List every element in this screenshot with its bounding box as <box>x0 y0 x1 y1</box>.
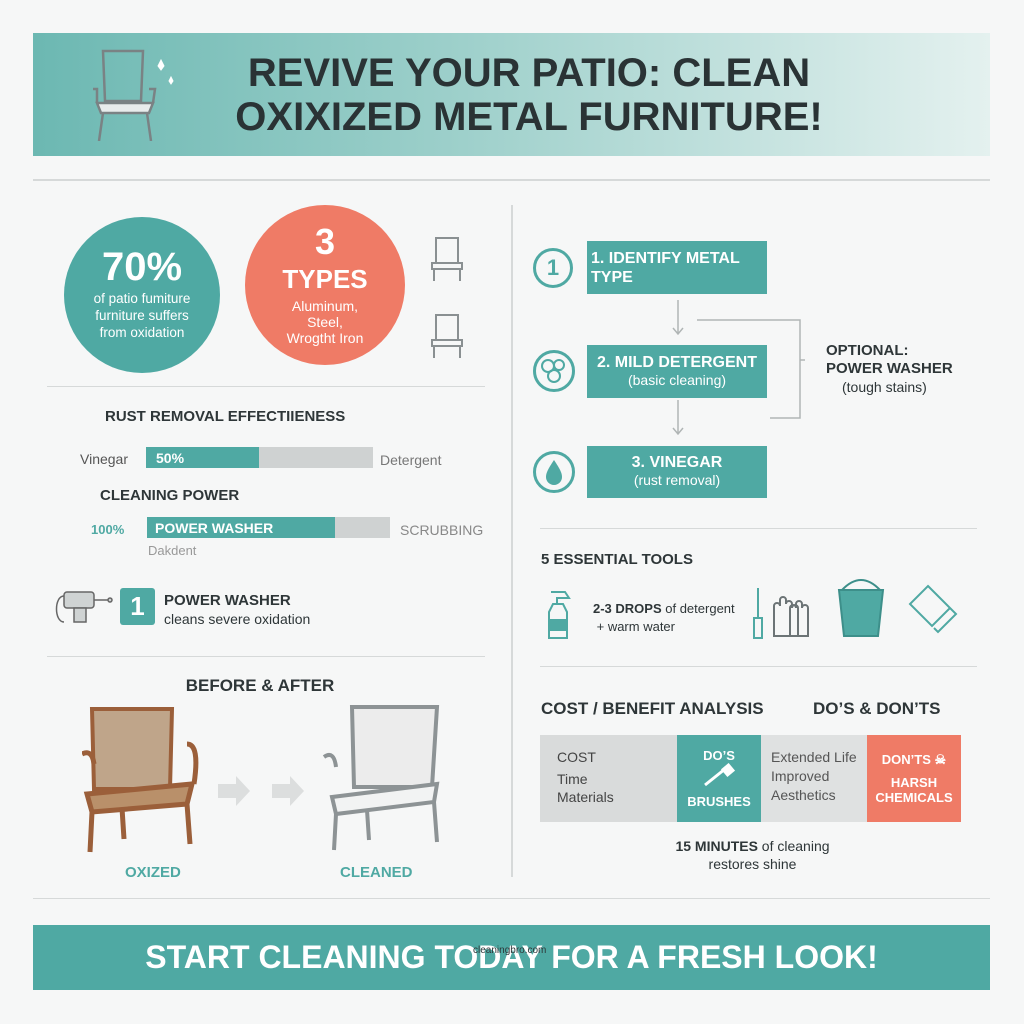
icon: bucket <box>838 579 884 637</box>
cost benefit table: Improved <box>771 768 829 784</box>
stat: 3 types circle: 3 <box>315 221 335 262</box>
dos and donts heading: DO’S & DON’TS <box>813 699 941 718</box>
arrows <box>218 776 304 806</box>
stat: 3 types circle: TYPES <box>282 264 368 294</box>
footer banner <box>33 925 990 990</box>
step 3 <box>533 446 767 498</box>
before & after: BEFORE & AFTER <box>186 676 334 695</box>
optional callout: (tough stains) <box>842 379 927 395</box>
step 2 <box>533 345 767 398</box>
callout: power washer <box>56 588 310 627</box>
chart: cleaning power: CLEANING POWER <box>100 487 239 504</box>
stat: 3 types circle <box>245 205 405 365</box>
cost benefit table: DO’S <box>703 748 735 763</box>
footer banner: START CLEANING TODAY FOR A FRESH LOOK! <box>145 939 878 975</box>
icon: chair <box>93 50 174 141</box>
before & after <box>82 676 440 881</box>
footer banner: cleaningbro.com <box>473 945 546 956</box>
chart: cleaning power <box>91 487 483 558</box>
callout: power washer: cleans severe oxidation <box>164 611 310 627</box>
stat: 70% circle: 70% <box>102 245 182 289</box>
step 1: TYPE <box>591 269 633 286</box>
icon: sponge <box>908 584 958 634</box>
optional callout: POWER WASHER <box>826 360 953 377</box>
chart: rust removal: Detergent <box>380 452 441 468</box>
icon: spray <box>548 591 571 639</box>
tools: + warm water <box>597 619 675 634</box>
title <box>235 51 823 139</box>
callout: power washer: 1 <box>130 591 145 621</box>
chart: cleaning power: 100% <box>91 522 124 537</box>
chart: rust removal: Vinegar <box>80 451 128 467</box>
step 2: (basic cleaning) <box>628 372 726 388</box>
cost benefit table: BRUSHES <box>687 794 751 809</box>
chart: cleaning power: POWER WASHER <box>155 520 273 536</box>
caption: 15 minutes: 15 MINUTES of cleaning <box>675 838 830 854</box>
header banner <box>33 33 990 156</box>
stat: 70% circle <box>64 217 220 373</box>
cost benefit table <box>540 735 961 822</box>
step 1 <box>533 241 767 294</box>
stat: 3 types circle: Steel, <box>307 314 343 330</box>
step 2: 2. MILD DETERGENT <box>597 354 757 371</box>
optional callout <box>826 342 953 395</box>
cost benefit table: Aesthetics <box>771 787 836 803</box>
icon: rusty chair <box>82 707 198 852</box>
optional callout: OPTIONAL: <box>826 342 908 359</box>
cost benefit table: CHEMICALS <box>875 790 953 805</box>
cost benefit table: Materials <box>557 789 614 805</box>
title: REVIVE YOUR PATIO: CLEAN <box>248 51 810 95</box>
chart: cleaning power: Dakdent <box>148 543 196 558</box>
caption: 15 minutes: restores shine <box>709 856 796 872</box>
cost benefit table: Extended Life <box>771 749 857 765</box>
cost benefit table: Time <box>557 771 588 787</box>
cost benefit heading: COST / BENEFIT ANALYSIS <box>541 699 764 718</box>
chart: rust removal: 50% <box>156 450 184 466</box>
step 1: 1. IDENTIFY METAL <box>591 250 740 267</box>
icon: small chairs <box>431 237 463 358</box>
stat: 70% circle: of patio fumiture <box>94 291 190 306</box>
step 3: (rust removal) <box>634 472 720 488</box>
before & after: OXIZED <box>125 864 181 881</box>
icon: clean chair <box>323 705 440 850</box>
icon: brush and gloves <box>753 588 809 639</box>
stat: 70% circle: furniture suffers <box>95 308 189 323</box>
step 3: 3. VINEGAR <box>632 454 722 471</box>
tools: 2-3 DROPS of detergent <box>593 601 735 616</box>
chart: rust removal <box>80 408 442 468</box>
chart: cleaning power: SCRUBBING <box>400 522 483 538</box>
step 1: 1 <box>547 255 559 280</box>
title: OXIXIZED METAL FURNITURE! <box>235 95 823 139</box>
cost benefit table: COST <box>557 749 596 765</box>
tools: 5 ESSENTIAL TOOLS <box>541 551 693 568</box>
chart: rust removal: RUST REMOVAL EFFECTIIENESS <box>105 408 345 425</box>
tools <box>541 551 958 639</box>
flow arrows <box>672 300 805 435</box>
cost benefit table: DON’TS ☠ <box>882 752 946 767</box>
callout: power washer: POWER WASHER <box>164 592 291 609</box>
before & after: CLEANED <box>340 864 413 881</box>
stat: 3 types circle: Wrogtht Iron <box>287 330 363 346</box>
cost benefit table: HARSH <box>891 775 937 790</box>
stat: 3 types circle: Aluminum, <box>292 298 358 314</box>
stat: 70% circle: from oxidation <box>100 325 184 340</box>
caption: 15 minutes <box>675 838 830 872</box>
